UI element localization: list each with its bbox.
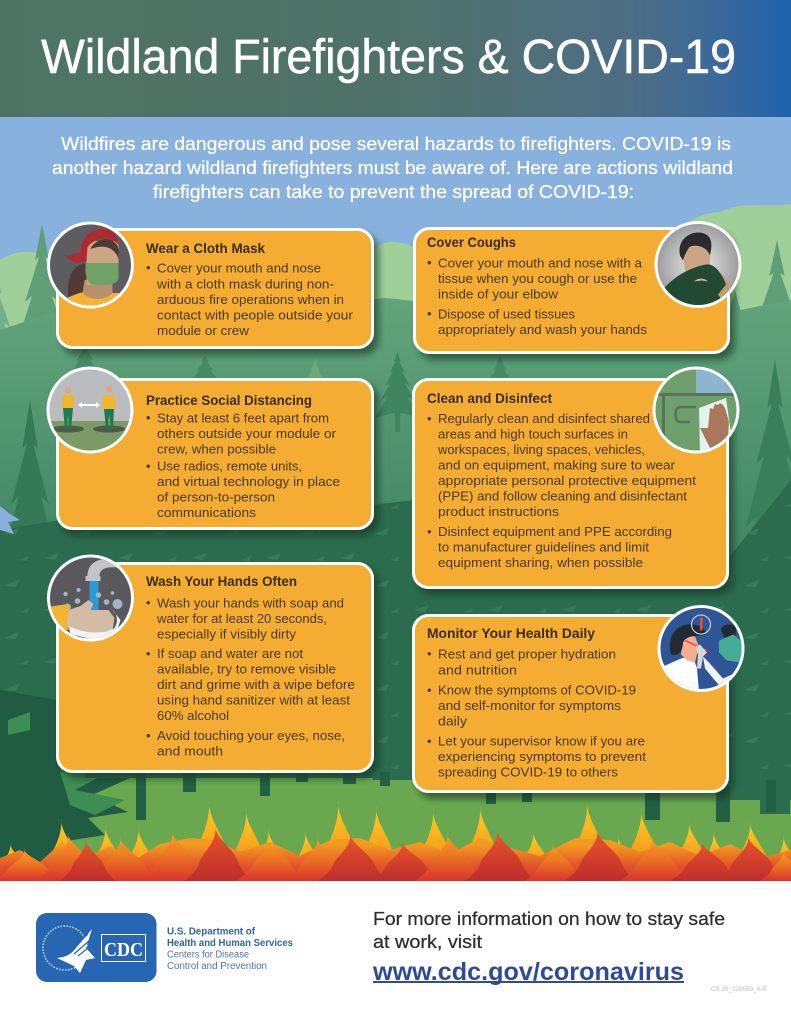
document code: CS 20_320589_A-E — [711, 987, 767, 993]
text: wash your hands often: 60% alcohol — [157, 708, 229, 723]
text: clean and disinfect: (PPE) and follow cleaning and disinfectant — [438, 488, 687, 504]
intro paragraph: firefighters can take to prevent the spread of COVID-19: — [153, 182, 634, 202]
text: cover coughs: • — [427, 306, 432, 321]
text: clean and disinfect: to manufacturer guidelines and limit — [438, 540, 649, 554]
text: practice social distancing: Stay at least 6 feet apart from — [157, 410, 329, 426]
text: monitor your health daily: • — [427, 682, 432, 698]
text: clean and disinfect: and on equipment, making sure to wear — [438, 458, 676, 472]
icon: temperature check — [657, 606, 745, 692]
text: wash your hands often: If soap and water are not — [157, 646, 303, 661]
text: clean and disinfect: Disinfect equipment and PPE according — [438, 524, 672, 539]
call to action — [373, 909, 725, 952]
heading: wash your hands often: Wash Your Hands Often — [146, 574, 297, 589]
panel: practice social distancing — [58, 380, 372, 528]
text: monitor your health daily: • — [427, 734, 432, 748]
text: cover coughs: • — [427, 255, 432, 270]
text: monitor your health daily — [427, 646, 646, 780]
text: monitor your health daily: Rest and get proper hydration — [438, 646, 616, 662]
text: cover coughs: inside of your elbow — [438, 286, 559, 302]
text: practice social distancing: Use radios, remote units, — [157, 458, 302, 474]
heading: cover coughs: Cover Coughs — [427, 235, 516, 250]
text: practice social distancing: others outside your module or — [157, 426, 337, 441]
text: monitor your health daily: spreading COVID-19 to others — [438, 764, 619, 780]
text: wash your hands often: using hand sanitizer with at least — [157, 692, 350, 708]
text: cover coughs — [427, 255, 648, 337]
text: clean and disinfect: Regularly clean and disinfect shared — [438, 411, 650, 426]
forest background — [0, 117, 791, 882]
text: cover coughs: appropriately and wash your hands — [438, 322, 648, 337]
text: wear a cloth mask: with a cloth mask during non- — [156, 276, 334, 292]
call to action: For more information on how to stay safe — [373, 909, 725, 929]
text: cover coughs: tissue when you cough or use the — [438, 271, 637, 286]
text: monitor your health daily: Let your supervisor know if you are — [438, 734, 645, 748]
agency name: Centers for Disease — [167, 950, 249, 960]
text: practice social distancing: of person-to-person — [157, 490, 275, 504]
text: practice social distancing: • — [146, 458, 151, 474]
text: wash your hands often: especially if visibly dirty — [157, 626, 297, 642]
text: monitor your health daily: daily — [438, 714, 468, 728]
white footer background — [0, 881, 791, 1024]
text: cover coughs: Cover your mouth and nose with a — [438, 256, 643, 270]
text: monitor your health daily: experiencing symptoms to prevent — [438, 749, 646, 764]
text: wear a cloth mask: arduous fire operations when in — [157, 292, 344, 307]
text: clean and disinfect: areas and high touch surfaces in — [438, 426, 628, 442]
text: wear a cloth mask: Cover your mouth and nose — [157, 260, 321, 276]
text: cover coughs: Dispose of used tissues — [438, 306, 575, 322]
icon: washing hands under faucet — [46, 556, 132, 640]
text: wash your hands often: Wash your hands with soap and — [157, 596, 344, 610]
text: wash your hands often: available, try to remove visible — [157, 662, 336, 676]
panel: clean and disinfect — [414, 380, 728, 588]
icon: person wearing cloth mask — [48, 223, 134, 310]
panel: monitor your health daily — [414, 616, 728, 792]
text: monitor your health daily: and self-monitor for symptoms — [438, 698, 622, 713]
text: clean and disinfect: product instructions — [438, 504, 560, 519]
agency name: U.S. Department of — [167, 926, 256, 938]
website link: www.cdc.gov/coronavirus — [372, 958, 684, 986]
icon: two people six feet apart — [46, 368, 134, 455]
text: wash your hands often: Avoid touching your eyes, nose, — [157, 728, 345, 743]
flames — [0, 800, 791, 881]
text: clean and disinfect — [427, 411, 696, 570]
heading: wear a cloth mask: Wear a Cloth Mask — [146, 241, 265, 256]
text: wear a cloth mask: contact with people outside your — [157, 308, 354, 322]
text: practice social distancing — [146, 410, 340, 520]
text: monitor your health daily: • — [427, 646, 432, 661]
panel: wear a cloth mask — [58, 230, 372, 348]
text: practice social distancing: communications — [157, 505, 257, 520]
agency name — [167, 926, 293, 972]
intro paragraph — [52, 134, 733, 202]
text: clean and disinfect: appropriate personal protective equipment — [438, 473, 696, 488]
icon: coughing into elbow — [656, 222, 740, 308]
text: monitor your health daily: Know the symptoms of COVID-19 — [438, 682, 636, 698]
intro paragraph: Wildfires are dangerous and pose several hazards to firefighters. COVID-19 is — [61, 134, 731, 154]
text: practice social distancing: • — [146, 410, 151, 425]
header band — [0, 0, 791, 117]
agency name: Control and Prevention — [167, 961, 267, 972]
text: clean and disinfect: • — [427, 411, 432, 426]
text: clean and disinfect: workspaces, living spaces, vehicles, — [437, 442, 645, 457]
text: monitor your health daily: and nutrition — [438, 662, 517, 678]
text: practice social distancing: and virtual technology in place — [157, 474, 340, 489]
text: wear a cloth mask: module or crew — [157, 323, 250, 338]
text: wash your hands often: and mouth — [157, 744, 223, 758]
text: wash your hands often: water for at least 20 seconds, — [156, 611, 327, 626]
heading: clean and disinfect: Clean and Disinfect — [427, 391, 552, 406]
text: wash your hands often: • — [146, 595, 151, 610]
logo: HHS and CDC — [36, 913, 156, 982]
text: wear a cloth mask: • — [146, 260, 151, 275]
panel: wash your hands often — [58, 564, 372, 772]
text: clean and disinfect: • — [427, 524, 432, 539]
text: wash your hands often: • — [146, 646, 151, 661]
text: clean and disinfect: equipment sharing, when possible — [438, 555, 643, 570]
text: wear a cloth mask — [146, 260, 354, 338]
text: wash your hands often: • — [146, 728, 151, 743]
icon: hand wiping surface — [652, 366, 740, 452]
heading: monitor your health daily: Monitor Your Health Daily — [427, 626, 595, 641]
call to action: at work, visit — [373, 932, 482, 952]
text: wash your hands often: dirt and grime with a wipe before — [157, 677, 355, 692]
title: Wildland Firefighters & COVID-19 — [41, 31, 736, 84]
logo: HHS and CDC: CDC — [104, 939, 143, 961]
intro paragraph: another hazard wildland firefighters must be aware of. Here are actions wildland — [52, 158, 733, 178]
agency name: Health and Human Services — [167, 938, 293, 949]
text: practice social distancing: crew, when possible — [157, 442, 276, 456]
panel: cover coughs — [414, 228, 728, 352]
text: wash your hands often — [146, 595, 355, 758]
heading: practice social distancing: Practice Social Distancing — [146, 393, 312, 408]
